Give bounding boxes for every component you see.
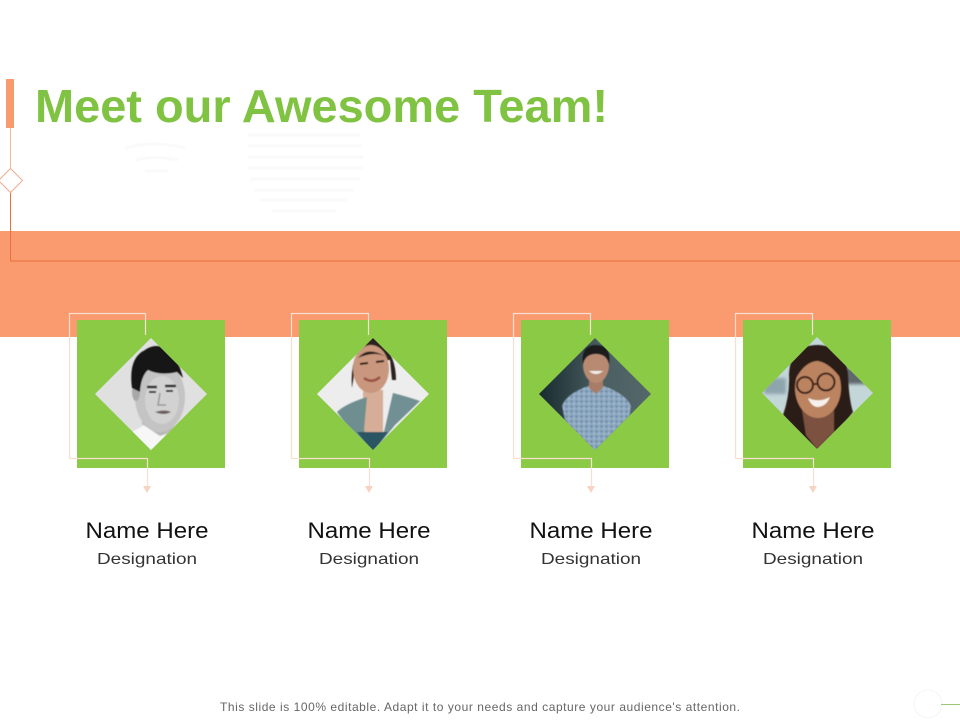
arrow 1 (143, 486, 151, 493)
name 1: Name Here (86, 518, 208, 543)
title accent bar (6, 79, 14, 128)
orange band (0, 231, 960, 337)
arrow 4 (809, 486, 817, 493)
designation 2: Designation (319, 551, 419, 568)
name 2: Name Here (308, 518, 430, 543)
diamond marker (0, 168, 22, 192)
portrait 3 (539, 338, 651, 450)
team card 2 (292, 314, 447, 568)
arrow 2 (365, 486, 373, 493)
portrait 2 (317, 338, 429, 450)
footer note: This slide is 100% editable. Adapt it to your needs and capture your audience's attention. (220, 700, 740, 714)
green square 4 (743, 320, 891, 468)
faint watermark (125, 135, 363, 211)
designation 3: Designation (541, 551, 641, 568)
green square 3 (521, 320, 669, 468)
designation 4: Designation (763, 551, 863, 568)
portrait 1 (95, 338, 207, 450)
team card 1 (70, 314, 225, 568)
name 4: Name Here (752, 518, 874, 543)
arrow 3 (587, 486, 595, 493)
bracket 2 (292, 314, 370, 488)
page number marker (914, 690, 960, 718)
bracket 3 (514, 314, 592, 488)
green square 1 (77, 320, 225, 468)
bracket 1 (70, 314, 148, 488)
green square 2 (299, 320, 447, 468)
portrait 4 (762, 337, 873, 449)
team card 4 (736, 314, 891, 568)
team card 3 (514, 314, 669, 568)
title: Meet our Awesome Team! (35, 80, 608, 132)
connector line (10, 128, 960, 261)
designation 1: Designation (97, 551, 197, 568)
name 3: Name Here (530, 518, 652, 543)
bracket 4 (736, 314, 814, 488)
